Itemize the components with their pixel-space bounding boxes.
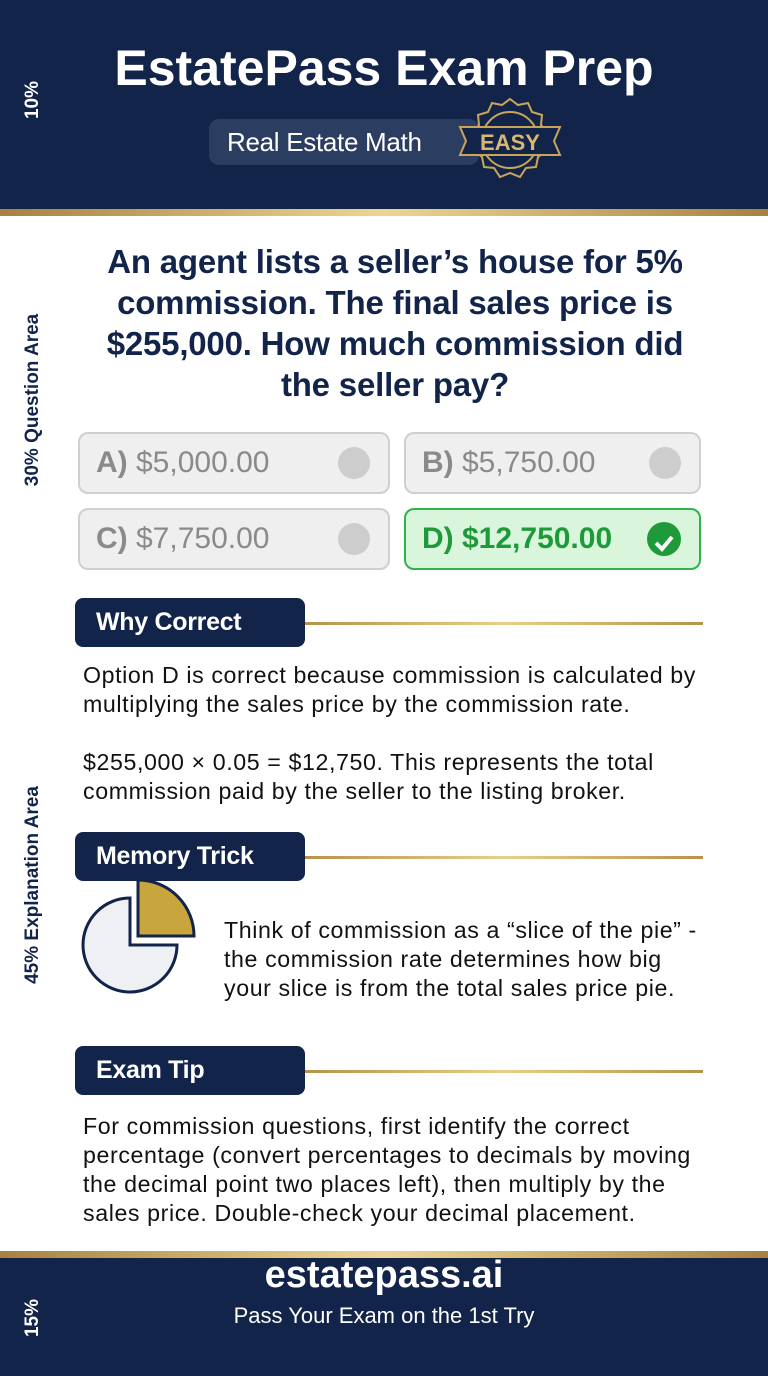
footer url: estatepass.ai <box>265 1254 503 1296</box>
option A: A) $5,000.00 <box>96 446 269 479</box>
text: why correct: commission paid by the seller to the listing broker. <box>83 778 626 804</box>
text: exam tip: For commission questions, first identify the correct <box>83 1113 630 1139</box>
side label explanation area: 45% Explanation Area <box>22 786 43 984</box>
heading: exam tip: Exam Tip <box>96 1056 204 1084</box>
text: exam tip <box>83 1113 691 1226</box>
text: exam tip: the decimal point two places left), then multiply by the <box>83 1171 666 1197</box>
text: exam tip: percentage (convert percentages to decimals by moving <box>83 1142 691 1168</box>
gold stripe top <box>0 209 768 216</box>
text: memory trick <box>224 917 697 1001</box>
gold stripe bottom <box>0 1251 768 1258</box>
heading: memory trick <box>75 832 305 881</box>
option B <box>404 432 701 494</box>
subtitle pill: Real Estate Math <box>227 127 422 157</box>
option D correct: D) $12,750.00 <box>422 522 612 555</box>
text: memory trick: the commission rate determines how big <box>224 946 662 972</box>
side label question area: 30% Question Area <box>22 314 43 486</box>
heading: exam tip <box>75 1046 305 1095</box>
question text: $255,000. How much commission did <box>107 325 683 362</box>
question text <box>107 243 683 403</box>
option A <box>78 432 390 494</box>
text: why correct: multiplying the sales price by the commission rate. <box>83 691 630 717</box>
text: why correct: $255,000 × 0.05 = $12,750. This represents the total <box>83 749 654 775</box>
text: memory trick: your slice is from the total sales price pie. <box>224 975 675 1001</box>
question text: commission. The final sales price is <box>117 284 673 321</box>
icon: pie <box>82 881 196 994</box>
heading: memory trick: Memory Trick <box>96 842 254 870</box>
question text: An agent lists a seller’s house for 5% <box>107 243 683 280</box>
footer tagline: Pass Your Exam on the 1st Try <box>234 1303 534 1328</box>
footer band <box>0 1258 768 1376</box>
question text: the seller pay? <box>281 366 509 403</box>
heading: why correct: Why Correct <box>96 608 241 636</box>
text: exam tip: sales price. Double-check your decimal placement. <box>83 1200 636 1226</box>
badge: easy <box>458 98 562 178</box>
heading: why correct <box>75 598 305 647</box>
badge: easy: EASY <box>480 130 540 155</box>
option D correct <box>404 508 701 570</box>
title: EstatePass Exam Prep <box>114 40 654 96</box>
text: why correct <box>83 662 696 804</box>
side label 15%: 15% <box>22 1299 43 1337</box>
header band <box>0 0 768 210</box>
option C: C) $7,750.00 <box>96 522 269 555</box>
option B: B) $5,750.00 <box>422 446 595 479</box>
text: why correct: Option D is correct because commission is calculated by <box>83 662 696 688</box>
subtitle pill <box>209 119 479 165</box>
text: memory trick: Think of commission as a “slice of the pie” - <box>224 917 697 943</box>
option C <box>78 508 390 570</box>
side label 10%: 10% <box>22 81 43 119</box>
